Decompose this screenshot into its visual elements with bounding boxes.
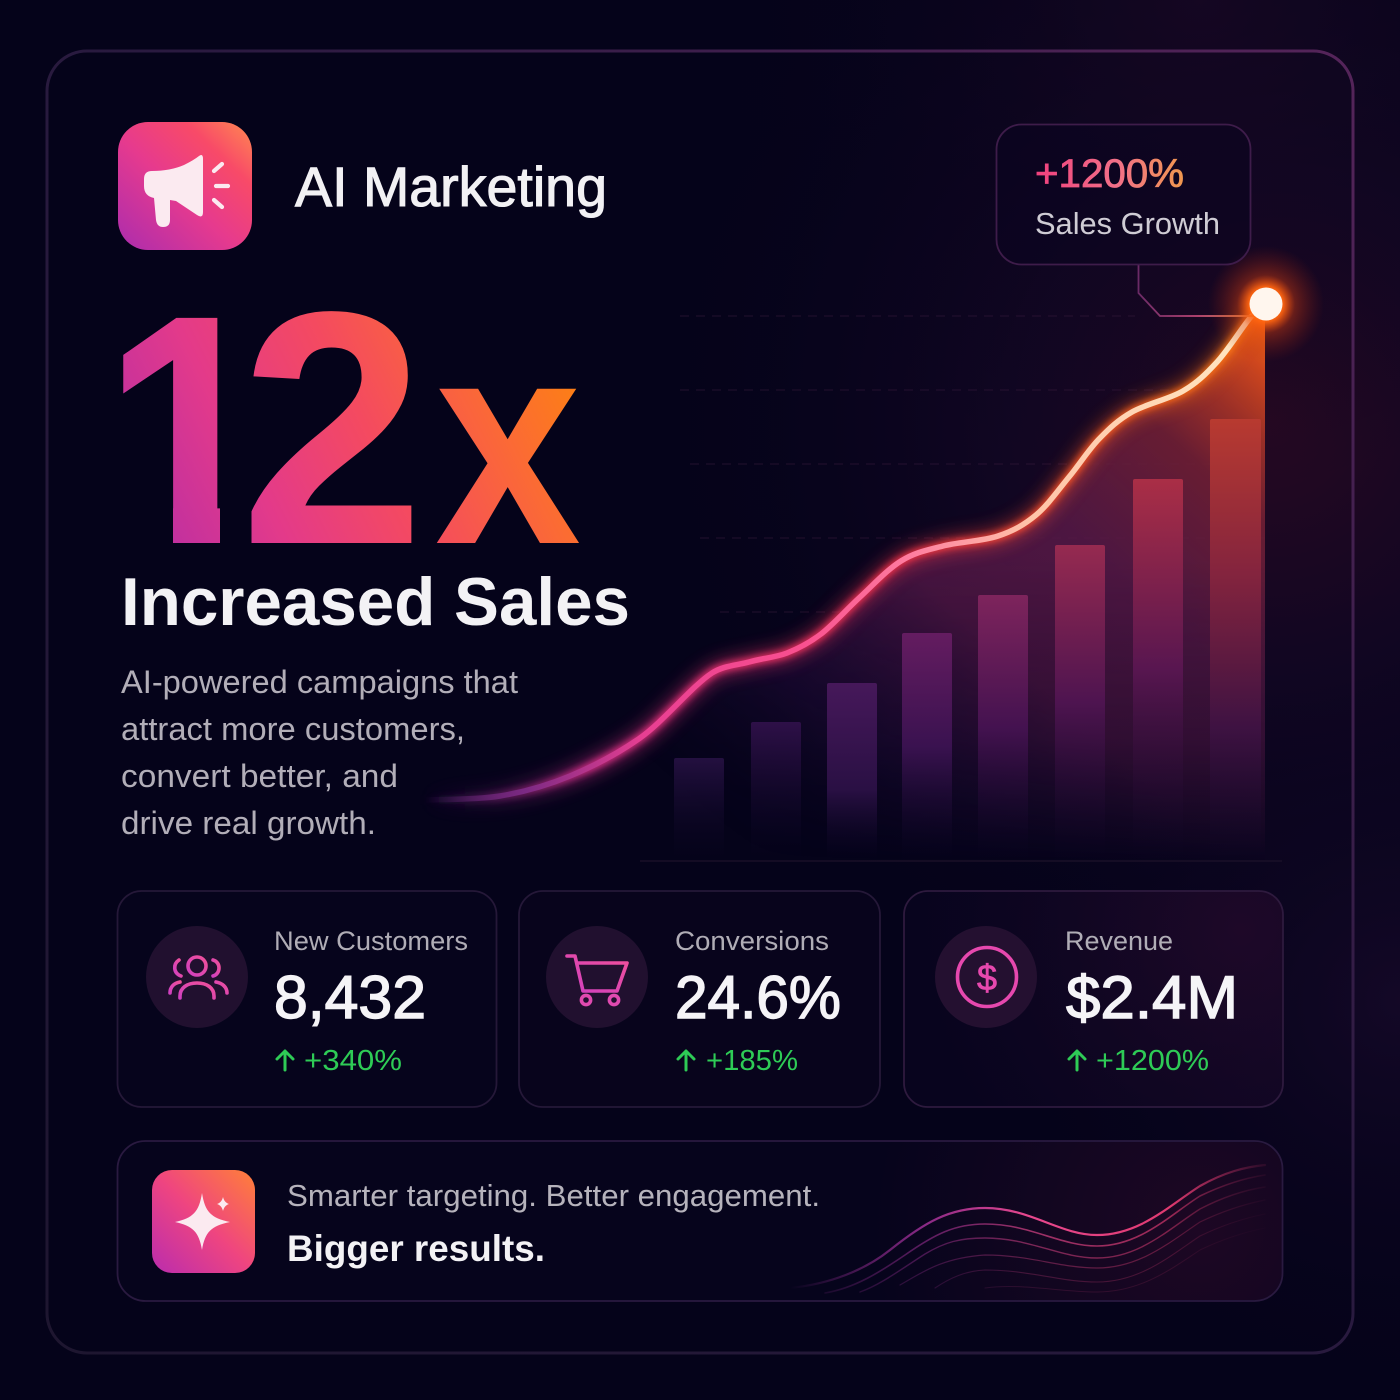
change: +340%: [304, 1045, 402, 1077]
description text: AI-powered campaigns that: [121, 664, 518, 700]
callout connector: [1138, 265, 1255, 316]
icon: shopping cart: [546, 926, 648, 1028]
headline number: 1: [104, 249, 272, 612]
icon: dollar coin: $: [977, 957, 997, 998]
change: +185%: [706, 1045, 798, 1077]
headline label: Increased Sales: [121, 564, 630, 640]
description text: convert better, and: [121, 758, 398, 794]
label: Revenue: [1065, 926, 1173, 956]
bars: [674, 419, 1261, 860]
icon: dollar coin: [935, 926, 1037, 1028]
value: 24.6%: [675, 964, 841, 1031]
banner text: Smarter targeting. Better engagement.: [287, 1178, 820, 1213]
growth curve: [425, 305, 1265, 800]
description text: attract more customers,: [121, 711, 465, 747]
headline number: 2: [240, 243, 425, 614]
chart: sales growth: [425, 246, 1324, 861]
description text: drive real growth.: [121, 805, 376, 841]
label: New Customers: [274, 926, 468, 956]
panel: conversions: [519, 891, 880, 1107]
area under curve: [724, 319, 1265, 831]
panel: revenue: [904, 891, 1283, 1107]
label: Conversions: [675, 926, 829, 956]
panel: bottom banner: [118, 1141, 1282, 1301]
panel: new customers: [118, 891, 496, 1107]
wave lines: [790, 1165, 1265, 1293]
change: +1200%: [1096, 1045, 1209, 1077]
description text: [121, 664, 518, 841]
icon: sparkle tile: [152, 1170, 255, 1273]
icon: megaphone tile: [118, 122, 252, 250]
header: brand icon and name: [118, 122, 607, 250]
panel: bottom banner: Bigger results.: [287, 1228, 545, 1269]
callout: sales growth: Sales Growth: [1035, 206, 1220, 241]
value: 8,432: [274, 964, 426, 1031]
headline number: [123, 311, 579, 543]
headline number: x: [435, 279, 583, 605]
value: $2.4M: [1066, 964, 1238, 1031]
chart grid lines: [680, 316, 1265, 612]
glowing end point: [1208, 246, 1324, 362]
callout: sales growth: +1200%: [1035, 152, 1184, 196]
icon: people: [146, 926, 248, 1028]
callout: sales growth: [996, 124, 1250, 264]
brand name: AI Marketing: [295, 155, 607, 218]
